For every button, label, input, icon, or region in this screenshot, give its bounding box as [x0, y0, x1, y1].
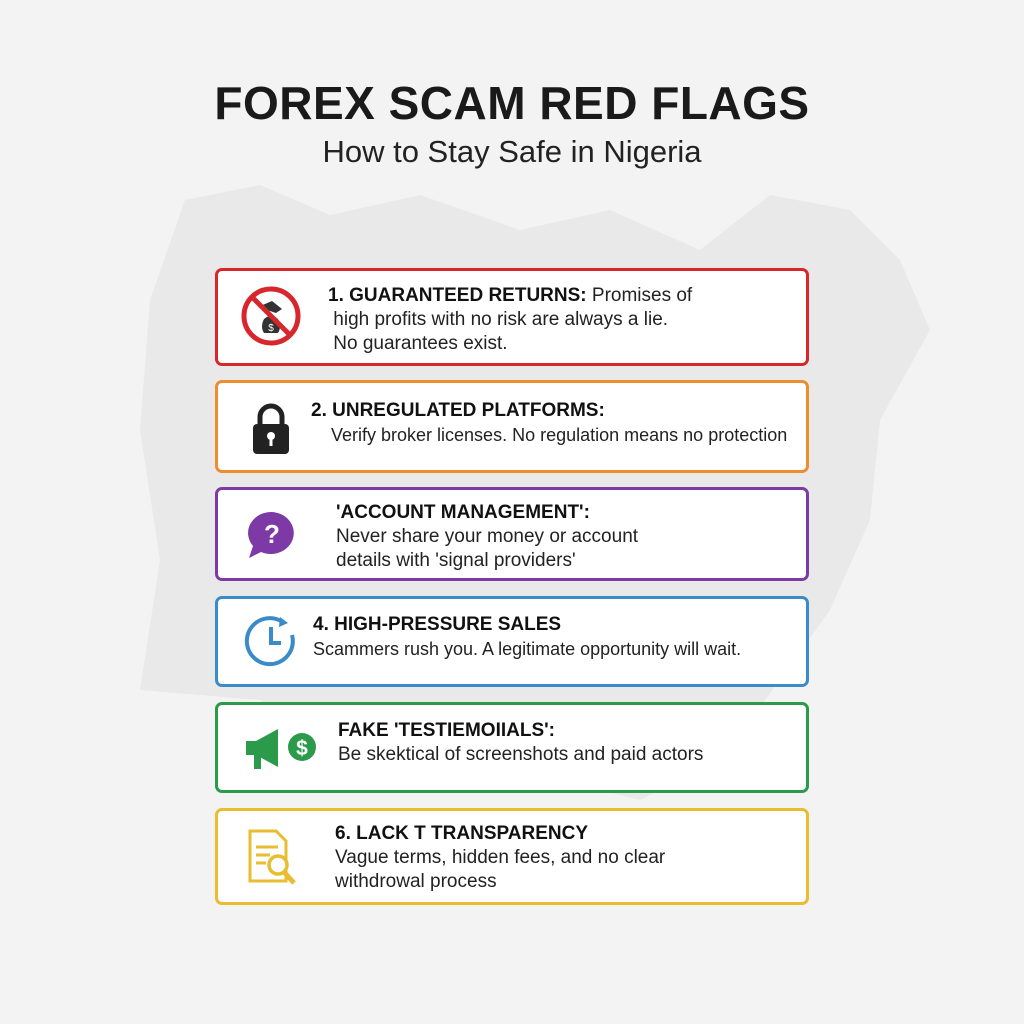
text [336, 502, 638, 571]
panel: guaranteed returns [215, 268, 809, 366]
icon: megaphone and dollar: $ [296, 737, 308, 760]
icon: question bubble [248, 512, 294, 558]
text: details with 'signal providers' [336, 550, 576, 571]
text: 1. GUARANTEED RETURNS: Promises of [328, 285, 692, 306]
text [338, 720, 703, 765]
title: FOREX SCAM RED FLAGS [214, 77, 810, 129]
icon: question bubble: ? [264, 519, 280, 549]
icon: no money sign: $ [268, 323, 274, 334]
subtitle: How to Stay Safe in Nigeria [322, 134, 702, 169]
text: No guarantees exist. [333, 333, 508, 354]
text: 2. UNREGULATED PLATFORMS: [311, 400, 605, 421]
text [328, 285, 692, 354]
text: Be skektical of screenshots and paid actors [338, 744, 703, 765]
icon: padlock [253, 404, 289, 454]
text: 'ACCOUNT MANAGEMENT': [336, 502, 590, 523]
panel: lack of transparency [215, 808, 809, 905]
panel: fake testimonials [215, 702, 809, 793]
text: high profits with no risk are always a lie. [333, 309, 668, 330]
text: Never share your money or account [336, 526, 638, 547]
text: FAKE 'TESTIEMOIIALS': [338, 720, 555, 741]
panel: high-pressure sales [215, 596, 809, 687]
panel: unregulated platforms [215, 380, 809, 473]
panel: account management [215, 487, 809, 581]
icon: document with magnifier [248, 830, 296, 885]
text: Scammers rush you. A legitimate opportunity will wait. [313, 639, 741, 659]
icon: megaphone and dollar [246, 729, 316, 769]
text: Verify broker licenses. No regulation means no protection [331, 425, 787, 445]
text: 4. HIGH-PRESSURE SALES [313, 614, 561, 635]
text [311, 400, 787, 445]
text [313, 614, 741, 659]
text [335, 823, 665, 892]
text: withdrowal process [335, 871, 497, 892]
text: Vague terms, hidden fees, and no clear [335, 847, 665, 868]
icon: no money sign [242, 286, 300, 346]
text: 6. LACK T TRANSPARENCY [335, 823, 588, 844]
icon: clock [244, 616, 295, 666]
